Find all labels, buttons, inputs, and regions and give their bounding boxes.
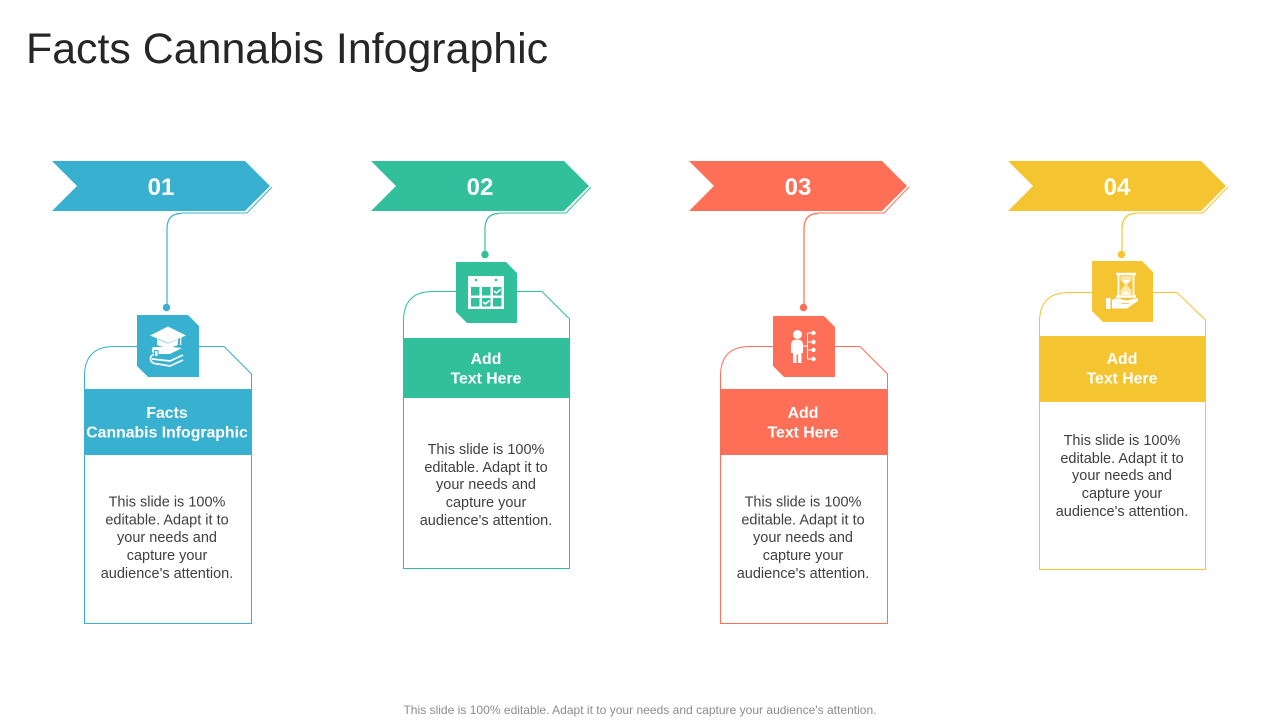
- heading band 04: Add: [1107, 351, 1137, 368]
- body text 02: audience's attention.: [420, 513, 552, 529]
- chevron 04: 04: [1104, 174, 1131, 201]
- heading band 02: Add: [471, 351, 501, 368]
- body text 01: audience's attention.: [101, 566, 233, 582]
- connector 01: [163, 214, 181, 311]
- card 03: [720, 346, 888, 624]
- heading band 01: Cannabis Infographic: [86, 424, 248, 442]
- title: Facts Cannabis Infographic: [26, 25, 548, 73]
- body text 01: capture your: [127, 548, 207, 564]
- connector 04: [1118, 214, 1136, 258]
- body text 03: This slide is 100%: [745, 494, 862, 510]
- chevron 01: 01: [148, 174, 174, 201]
- chevron 01: [52, 161, 272, 213]
- heading band 03: [720, 389, 888, 455]
- chevron 03: 03: [785, 174, 811, 201]
- body text 02: your needs and: [436, 477, 536, 493]
- heading band 01: [84, 389, 252, 455]
- connector 02: [481, 214, 499, 258]
- body text 04: audience's attention.: [1056, 504, 1188, 520]
- heading band 03: Text Here: [768, 424, 839, 442]
- panel: step 01: [52, 161, 272, 624]
- panel: step 02: [371, 161, 591, 568]
- heading band 02: Text Here: [451, 370, 522, 388]
- chevron 04: [1008, 161, 1228, 213]
- icon: person with nodes: [773, 316, 835, 377]
- body text 01: This slide is 100%: [109, 494, 226, 510]
- body text 01: your needs and: [117, 530, 217, 546]
- body text 04: capture your: [1082, 486, 1162, 502]
- panel: step 04: [1008, 161, 1228, 570]
- card 01: [84, 346, 252, 624]
- body text 03: capture your: [763, 548, 843, 564]
- footer note: This slide is 100% editable. Adapt it to your needs and capture your audience's attention.: [403, 703, 877, 717]
- heading band 02: [403, 338, 570, 398]
- body text 03: editable. Adapt it to: [741, 512, 865, 528]
- body text 03: your needs and: [753, 530, 853, 546]
- body text 01: editable. Adapt it to: [105, 512, 229, 528]
- heading band 04: [1039, 336, 1206, 402]
- body text 04: editable. Adapt it to: [1060, 451, 1184, 467]
- icon: books and graduation cap: [137, 315, 199, 377]
- heading band 01: Facts: [146, 405, 188, 422]
- body text 02: editable. Adapt it to: [424, 460, 548, 476]
- body text 03: audience's attention.: [737, 566, 869, 582]
- card 02: [404, 292, 570, 568]
- panel: step 03: [689, 161, 909, 624]
- heading band 03: Add: [788, 405, 818, 422]
- chevron 02: [371, 161, 591, 213]
- body text 02: capture your: [446, 495, 526, 511]
- body text 02: This slide is 100%: [428, 442, 545, 458]
- connector 03: [800, 214, 818, 311]
- body text 04: This slide is 100%: [1064, 433, 1181, 449]
- icon: hourglass on hand: [1092, 261, 1153, 322]
- card 04: [1040, 292, 1206, 570]
- chevron 02: 02: [467, 174, 493, 201]
- icon: calendar: [456, 262, 517, 323]
- body text 04: your needs and: [1072, 468, 1172, 484]
- heading band 04: Text Here: [1087, 370, 1158, 388]
- chevron 03: [689, 161, 909, 213]
